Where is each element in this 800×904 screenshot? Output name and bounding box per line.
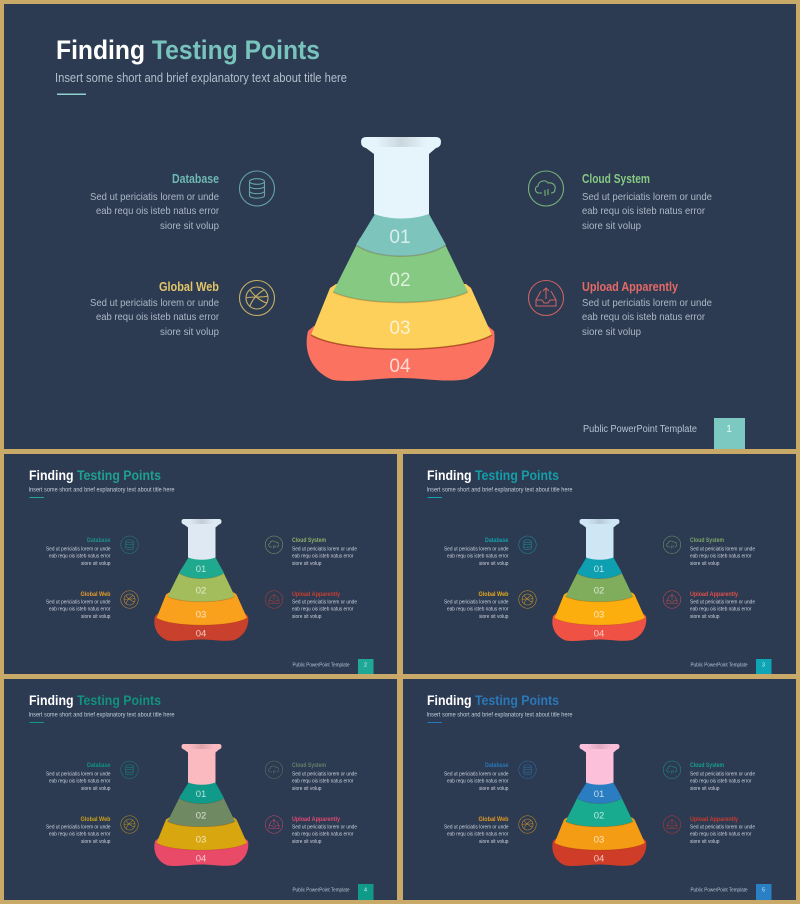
block: Cloud System: siore sit volup	[690, 786, 720, 792]
block: Database	[90, 172, 219, 232]
subtitle: Insert some short and brief explanatory text about title here	[426, 486, 573, 494]
panel: slide 4	[4, 679, 397, 900]
band 02	[168, 794, 235, 827]
flask neck	[361, 137, 441, 218]
block: Database: Database	[87, 537, 111, 544]
block: Global Web: Global Web	[80, 591, 111, 598]
numbers: 04	[196, 628, 206, 640]
block: Database	[444, 537, 509, 567]
numbers: 01	[196, 789, 206, 800]
block: Global Web: Global Web	[478, 816, 509, 823]
band 02	[333, 238, 468, 302]
numbers: 02	[389, 270, 411, 291]
icon: globe	[121, 591, 138, 608]
block: Upload Apparently: siore sit volup	[292, 839, 322, 845]
block: Database: siore sit volup	[479, 786, 509, 792]
block: Cloud System: Sed ut periciatis lorem or unde	[690, 546, 755, 552]
block: Upload Apparently: siore sit volup	[690, 614, 720, 620]
block: Database: eab requ ois isteb natus error	[96, 205, 219, 217]
block: Cloud System: Sed ut periciatis lorem or unde	[582, 191, 712, 203]
block: Cloud System	[690, 537, 755, 567]
block: Upload Apparently	[690, 816, 755, 845]
block: Upload Apparently: eab requ ois isteb natus error	[690, 606, 752, 612]
numbers: 03	[594, 610, 604, 620]
block: Upload Apparently: Upload Apparently	[690, 816, 738, 823]
icon: database	[519, 761, 536, 778]
band 04	[307, 326, 495, 381]
block: Cloud System: Cloud System	[292, 762, 326, 769]
block: Cloud System: eab requ ois isteb natus error	[690, 554, 752, 560]
page number	[714, 418, 745, 449]
flask	[552, 519, 646, 641]
page number: 2	[364, 662, 367, 668]
numbers	[594, 789, 604, 864]
page number	[358, 659, 374, 674]
block: Database: Sed ut periciatis lorem or unde	[444, 546, 509, 552]
block: Database	[444, 762, 509, 792]
block: Cloud System: siore sit volup	[292, 786, 322, 792]
footer label: Public PowerPoint Template	[292, 662, 350, 668]
icon: upload tray	[663, 591, 681, 608]
block: Global Web: Sed ut periciatis lorem or unde	[90, 297, 219, 309]
band 04	[154, 614, 248, 641]
icon: upload tray	[265, 816, 283, 833]
numbers: 04	[594, 854, 604, 864]
title: Finding Testing Points	[427, 693, 559, 708]
block: Cloud System: Sed ut periciatis lorem or unde	[690, 772, 755, 778]
block: Database	[46, 537, 111, 567]
numbers: 04	[196, 854, 206, 864]
block: Upload Apparently: Upload Apparently	[690, 591, 738, 598]
block: Cloud System	[292, 762, 357, 792]
block: Upload Apparently: eab requ ois isteb natus error	[292, 832, 354, 838]
block: Global Web: Global Web	[159, 280, 219, 294]
block: Upload Apparently: siore sit volup	[292, 614, 322, 620]
block: Global Web: Global Web	[80, 816, 111, 823]
block: Cloud System: Cloud System	[292, 537, 326, 544]
block: Global Web: siore sit volup	[81, 614, 111, 620]
title: Finding Testing Points	[427, 468, 559, 483]
subtitle: Insert some short and brief explanatory text about title here	[28, 486, 175, 494]
numbers: 04	[594, 628, 604, 640]
icon: upload tray	[663, 816, 681, 833]
block: Cloud System: eab requ ois isteb natus error	[292, 554, 354, 560]
icon: cloud	[663, 536, 681, 554]
block: Upload Apparently	[582, 280, 712, 338]
block: Cloud System: eab requ ois isteb natus error	[690, 778, 752, 784]
band 01	[577, 782, 622, 804]
block: Global Web: Sed ut periciatis lorem or unde	[46, 600, 111, 606]
band 01	[577, 558, 622, 579]
block: Global Web: Global Web	[478, 591, 509, 598]
block: Upload Apparently: Sed ut periciatis lorem or unde	[582, 297, 712, 309]
band 03	[156, 592, 247, 625]
block: Global Web: eab requ ois isteb natus error	[49, 832, 111, 838]
block: Upload Apparently: Upload Apparently	[292, 591, 340, 598]
icon: database	[121, 536, 138, 554]
block: Global Web: siore sit volup	[81, 839, 111, 845]
band 03	[554, 818, 645, 850]
block: Cloud System: eab requ ois isteb natus error	[292, 778, 354, 784]
block: Upload Apparently: Sed ut periciatis lorem or unde	[690, 824, 755, 830]
block: Database: eab requ ois isteb natus error	[49, 778, 111, 784]
block: Cloud System: siore sit volup	[582, 220, 641, 232]
band 03	[554, 592, 645, 625]
page number	[756, 884, 772, 900]
title: Finding Testing Points	[56, 35, 320, 65]
block: Database: eab requ ois isteb natus error	[49, 554, 111, 560]
band 02	[168, 570, 235, 602]
block: Upload Apparently: Upload Apparently	[582, 280, 678, 294]
block: Global Web	[444, 591, 509, 620]
numbers: 03	[196, 834, 206, 846]
numbers: 02	[594, 586, 604, 596]
icon: cloud	[528, 171, 564, 206]
block: Global Web: Sed ut periciatis lorem or unde	[46, 824, 111, 830]
block: Database: Sed ut periciatis lorem or unde	[46, 546, 111, 552]
icon: globe	[121, 816, 138, 833]
block: Database: Database	[172, 172, 219, 186]
icon: cloud	[663, 761, 681, 778]
block: Upload Apparently: Upload Apparently	[292, 816, 340, 823]
numbers: 03	[594, 834, 604, 846]
block: Upload Apparently: siore sit volup	[582, 326, 641, 338]
numbers	[594, 564, 604, 640]
numbers	[196, 789, 206, 864]
block: Global Web: eab requ ois isteb natus error	[447, 606, 509, 612]
flask	[307, 137, 495, 381]
page number	[756, 659, 772, 674]
numbers: 04	[389, 356, 411, 377]
panel: slide 2	[4, 454, 397, 674]
block: Upload Apparently: Sed ut periciatis lorem or unde	[690, 600, 755, 606]
block: Global Web	[90, 280, 219, 338]
band 03	[156, 818, 247, 850]
block: Upload Apparently: Sed ut periciatis lorem or unde	[292, 824, 357, 830]
page number	[358, 884, 374, 900]
block: Cloud System: Sed ut periciatis lorem or unde	[292, 546, 357, 552]
block: Upload Apparently: eab requ ois isteb natus error	[582, 311, 705, 323]
flask	[154, 519, 248, 641]
block: Global Web: siore sit volup	[479, 839, 509, 845]
numbers	[389, 227, 411, 377]
block: Database: siore sit volup	[160, 220, 219, 232]
block: Database: siore sit volup	[81, 561, 111, 567]
numbers: 01	[594, 564, 604, 575]
block: Cloud System: Cloud System	[690, 762, 724, 769]
block: Upload Apparently: siore sit volup	[690, 839, 720, 845]
block: Upload Apparently	[292, 591, 357, 620]
numbers	[196, 564, 206, 640]
flask neck	[580, 744, 620, 785]
subtitle: Insert some short and brief explanatory text about title here	[55, 71, 347, 85]
block: Database: siore sit volup	[479, 561, 509, 567]
numbers: 03	[389, 318, 411, 339]
panel: slide 3	[403, 454, 796, 674]
block: Cloud System: eab requ ois isteb natus error	[582, 205, 705, 217]
block: Database: Database	[485, 537, 509, 544]
title: Finding Testing Points	[29, 693, 161, 708]
footer label: Public PowerPoint Template	[690, 888, 748, 894]
numbers: 01	[594, 789, 604, 800]
block: Cloud System: Cloud System	[582, 172, 650, 186]
subtitle: Insert some short and brief explanatory text about title here	[426, 712, 573, 718]
panel: main slide	[4, 4, 796, 449]
icon: globe	[240, 280, 274, 316]
band 02	[566, 570, 633, 602]
icon: upload tray	[528, 280, 564, 316]
icon: cloud	[265, 536, 283, 554]
block: Cloud System: siore sit volup	[690, 561, 720, 567]
flask neck	[580, 519, 620, 560]
band 01	[356, 214, 446, 256]
band 02	[566, 794, 633, 827]
block: Cloud System	[292, 537, 357, 567]
numbers: 02	[196, 586, 206, 596]
block: Cloud System	[690, 762, 755, 792]
icon: database	[121, 761, 138, 778]
flask	[154, 744, 248, 866]
page number: 5	[762, 888, 765, 894]
block: Global Web: Sed ut periciatis lorem or unde	[444, 600, 509, 606]
block: Database: Sed ut periciatis lorem or unde	[90, 191, 219, 203]
block: Cloud System: siore sit volup	[292, 561, 322, 567]
page number: 4	[364, 888, 367, 894]
numbers: 03	[196, 610, 206, 620]
icon: database	[519, 536, 536, 554]
numbers: 01	[389, 227, 411, 248]
block: Cloud System: Cloud System	[690, 537, 724, 544]
band 01	[179, 558, 224, 579]
band 04	[154, 838, 248, 866]
block: Global Web: eab requ ois isteb natus error	[96, 311, 219, 323]
page number: 1	[726, 424, 732, 435]
block: Global Web: Sed ut periciatis lorem or unde	[444, 824, 509, 830]
block: Database: Sed ut periciatis lorem or unde	[46, 772, 111, 778]
block: Database: eab requ ois isteb natus error	[447, 778, 509, 784]
band 04	[552, 838, 646, 866]
footer label: Public PowerPoint Template	[292, 888, 350, 894]
icon: database	[240, 171, 274, 206]
subtitle: Insert some short and brief explanatory text about title here	[28, 712, 175, 718]
band 03	[311, 284, 492, 349]
block: Cloud System	[582, 172, 712, 232]
band 04	[552, 614, 646, 641]
block: Global Web	[444, 816, 509, 845]
flask neck	[182, 519, 222, 560]
block: Global Web	[46, 591, 111, 620]
title: Finding Testing Points	[29, 468, 161, 483]
footer label: Public PowerPoint Template	[690, 662, 748, 668]
block: Global Web	[46, 816, 111, 845]
panel: slide 5	[403, 679, 796, 900]
block: Cloud System: Sed ut periciatis lorem or unde	[292, 772, 357, 778]
icon: upload tray	[265, 591, 283, 608]
block: Upload Apparently	[292, 816, 357, 845]
flask	[552, 744, 646, 866]
band 01	[179, 782, 224, 804]
block: Global Web: siore sit volup	[160, 326, 219, 338]
block: Upload Apparently	[690, 591, 755, 620]
block: Database: siore sit volup	[81, 786, 111, 792]
block: Upload Apparently: eab requ ois isteb natus error	[690, 832, 752, 838]
flask neck	[182, 744, 222, 785]
block: Database	[46, 762, 111, 792]
block: Global Web: eab requ ois isteb natus error	[447, 832, 509, 838]
block: Upload Apparently: eab requ ois isteb natus error	[292, 606, 354, 612]
block: Upload Apparently: Sed ut periciatis lorem or unde	[292, 600, 357, 606]
numbers: 02	[594, 810, 604, 822]
footer label: Public PowerPoint Template	[583, 424, 697, 435]
block: Global Web: siore sit volup	[479, 614, 509, 620]
icon: globe	[519, 591, 536, 608]
icon: cloud	[265, 761, 283, 778]
page number: 3	[762, 662, 765, 668]
block: Database: Database	[485, 762, 509, 769]
block: Database: eab requ ois isteb natus error	[447, 554, 509, 560]
block: Database: Sed ut periciatis lorem or unde	[444, 772, 509, 778]
icon: globe	[519, 816, 536, 833]
block: Database: Database	[87, 762, 111, 769]
numbers: 01	[196, 564, 206, 575]
numbers: 02	[196, 810, 206, 822]
block: Global Web: eab requ ois isteb natus error	[49, 606, 111, 612]
